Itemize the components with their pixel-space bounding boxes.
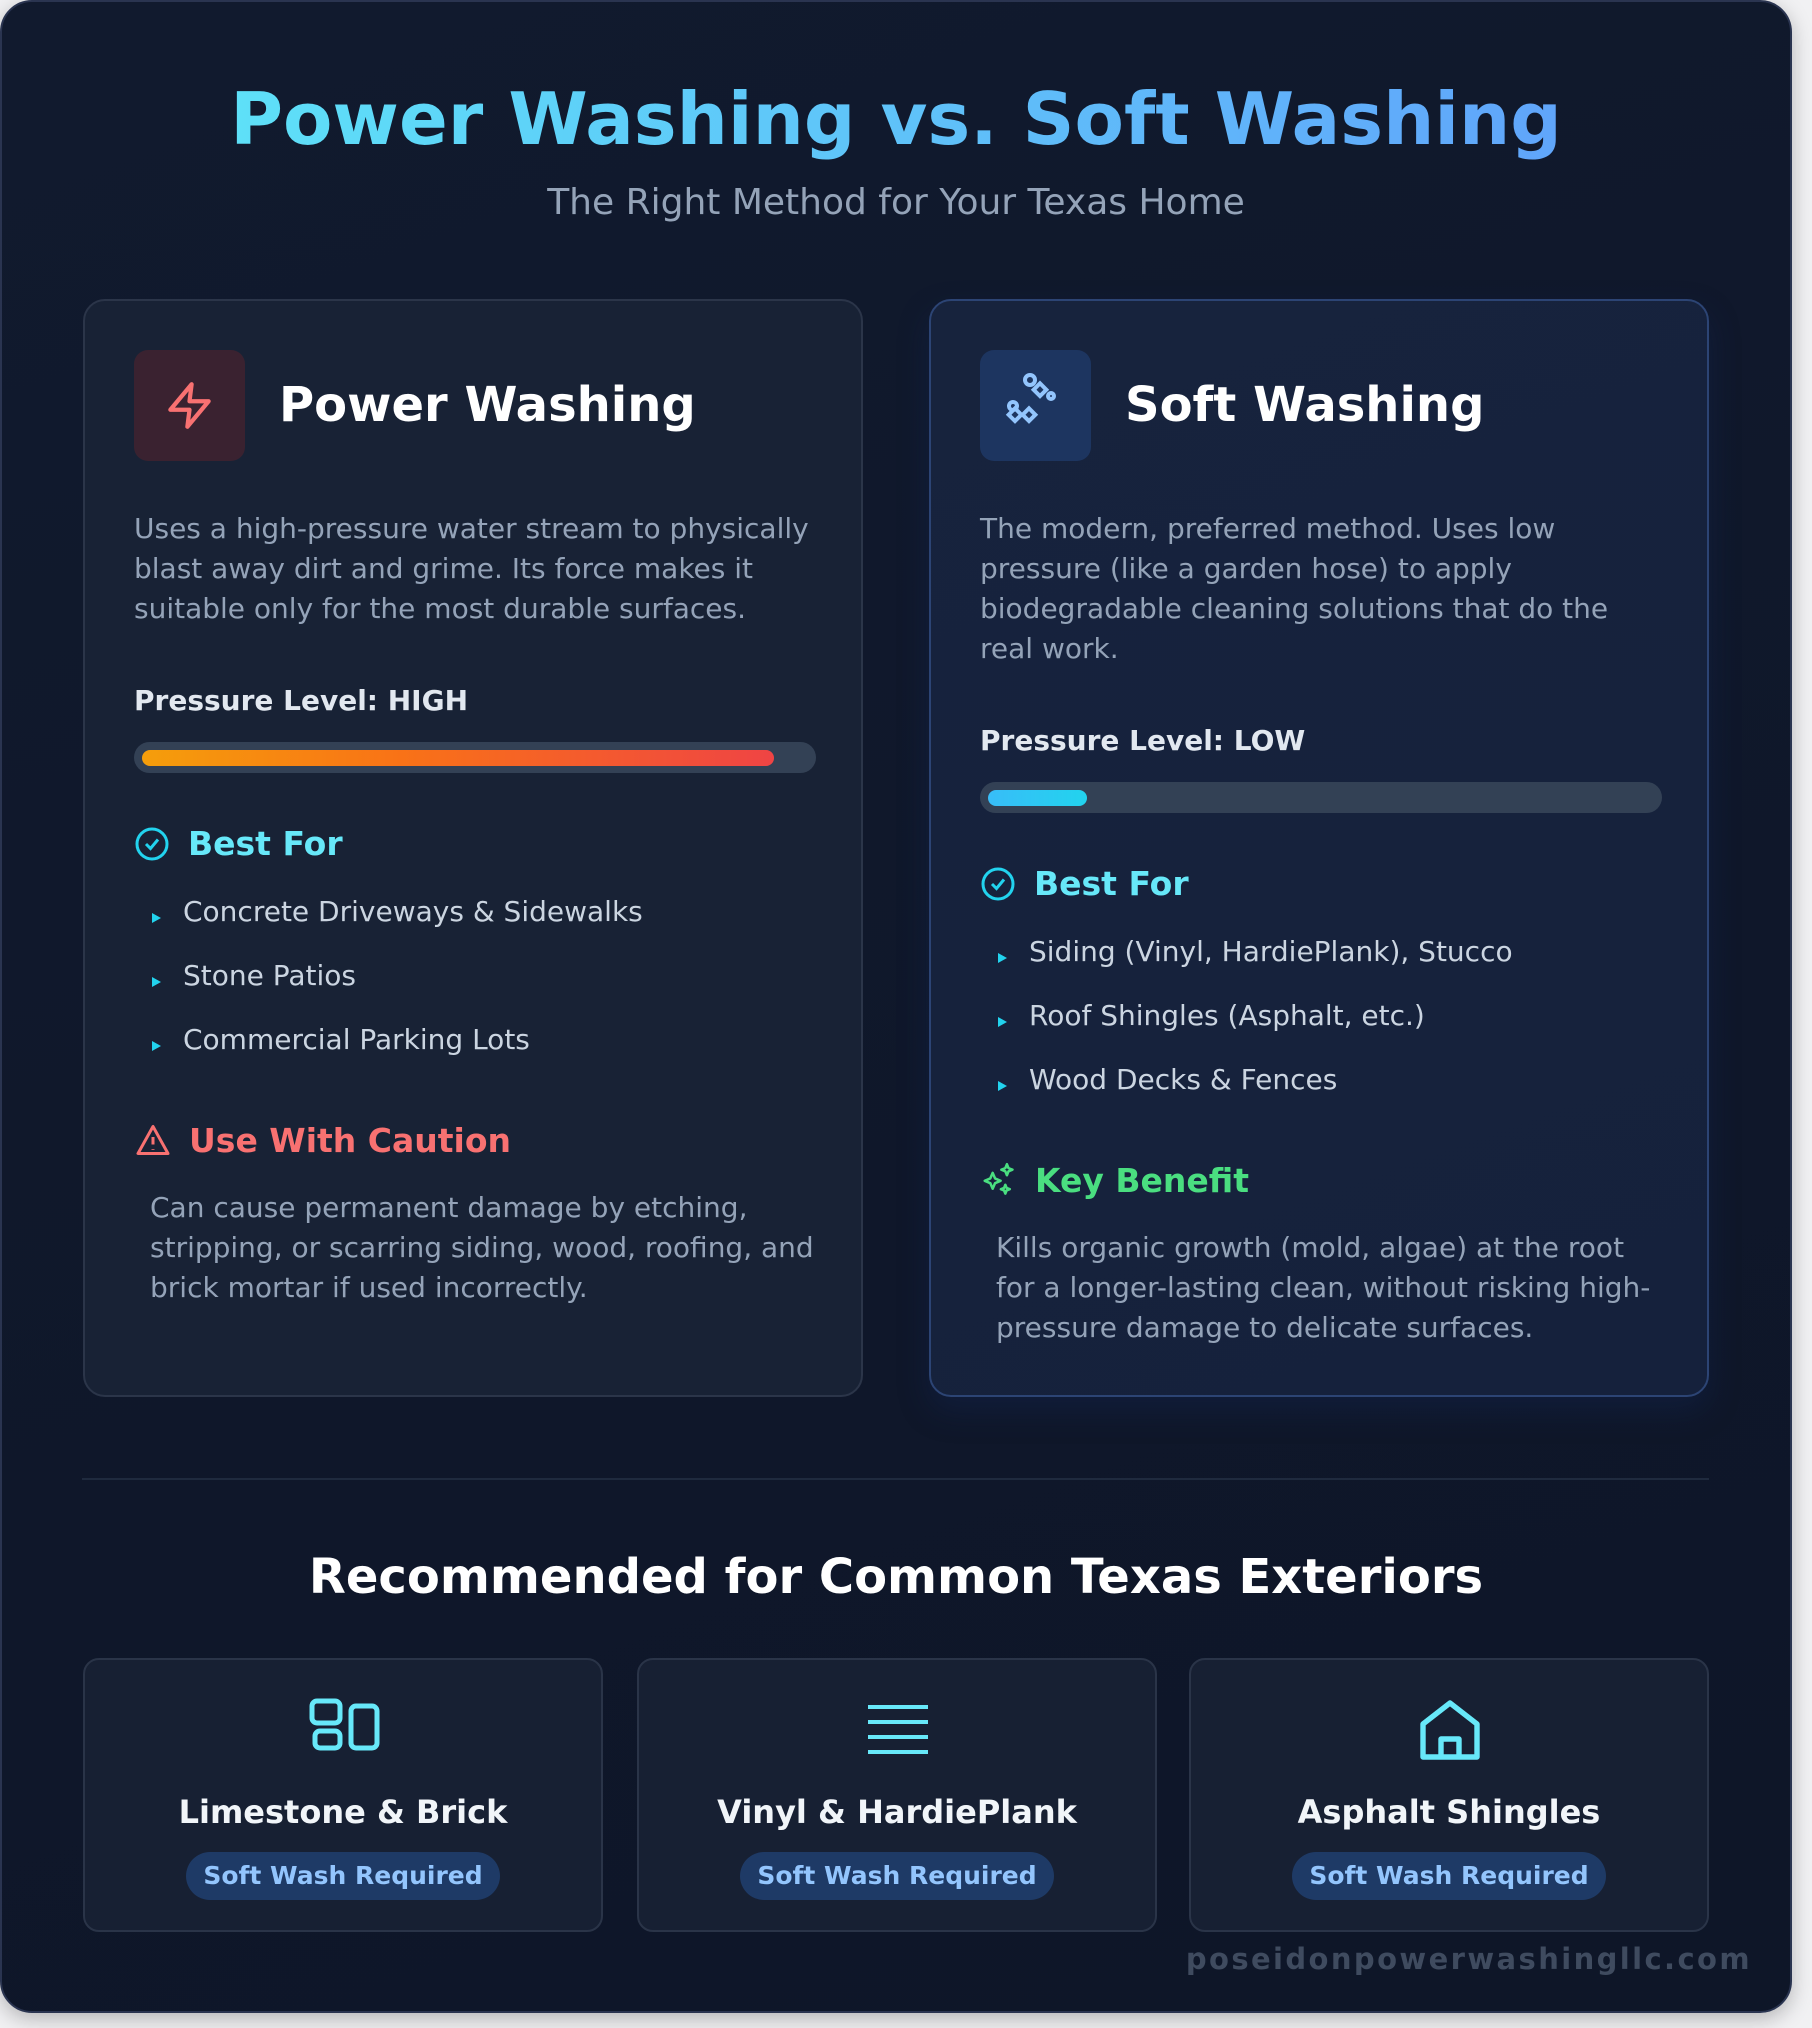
card: limestone & brick: [83, 1658, 603, 1932]
panel: soft washing: [929, 299, 1709, 1397]
pressure label: Pressure Level: HIGH: [134, 684, 468, 717]
footer url: poseidonpowerwashingllc.com: [1186, 1942, 1752, 1976]
best for list: Stone Patios: [183, 959, 356, 992]
pressure bar: [980, 782, 1662, 813]
icon: bubbles: [980, 350, 1091, 461]
best for heading: Best For: [1034, 864, 1189, 903]
description: The modern, preferred method. Uses low pressure (like a garden hose) to apply biodegradable cleaning solutions that do the real work.: [980, 512, 1608, 665]
best for list: [152, 895, 643, 1056]
icon: lines: [868, 1705, 928, 1754]
panel: power washing: [83, 299, 863, 1397]
pressure label: Pressure Level: LOW: [980, 724, 1305, 757]
card: asphalt shingles: [1189, 1658, 1709, 1932]
best for list: Commercial Parking Lots: [183, 1023, 530, 1056]
description: Uses a high-pressure water stream to physically blast away dirt and grime. Its force makes it suitable only for the most durable surfaces.: [134, 512, 809, 625]
key benefit heading: Key Benefit: [1035, 1161, 1249, 1200]
best for list: Wood Decks & Fences: [1029, 1063, 1337, 1096]
best for list: Roof Shingles (Asphalt, etc.): [1029, 999, 1425, 1032]
card: vinyl & hardieplank: Soft Wash Required: [757, 1861, 1037, 1890]
key benefit text: Kills organic growth (mold, algae) at the root for a longer-lasting clean, without risking high-pressure damage to delicate surfaces.: [996, 1231, 1650, 1344]
pressure bar: [134, 742, 816, 773]
caution text: Can cause permanent damage by etching, stripping, or scarring siding, wood, roofing, and brick mortar if used incorrectly.: [150, 1191, 814, 1304]
heading: Soft Washing: [1125, 377, 1484, 433]
card: limestone & brick: Limestone & Brick: [179, 1793, 507, 1831]
caution heading: Use With Caution: [189, 1121, 511, 1160]
title: Power Washing vs. Soft Washing: [230, 77, 1562, 161]
icon: blocks: [310, 1698, 380, 1750]
card: asphalt shingles: Soft Wash Required: [1309, 1861, 1589, 1890]
best for list: Siding (Vinyl, HardiePlank), Stucco: [1029, 935, 1513, 968]
card: vinyl & hardieplank: [637, 1658, 1157, 1932]
best for list: [998, 935, 1513, 1096]
card: limestone & brick: Soft Wash Required: [203, 1861, 483, 1890]
card: asphalt shingles: Asphalt Shingles: [1298, 1793, 1600, 1831]
icon: lightning: [134, 350, 245, 461]
best for list: Concrete Driveways & Sidewalks: [183, 895, 643, 928]
card: vinyl & hardieplank: Vinyl & HardiePlank: [717, 1793, 1077, 1831]
section heading: Recommended for Common Texas Exteriors: [309, 1549, 1483, 1605]
heading: Power Washing: [279, 377, 696, 433]
subtitle: The Right Method for Your Texas Home: [547, 182, 1245, 223]
icon: house: [1420, 1700, 1480, 1760]
best for heading: Best For: [188, 824, 343, 863]
